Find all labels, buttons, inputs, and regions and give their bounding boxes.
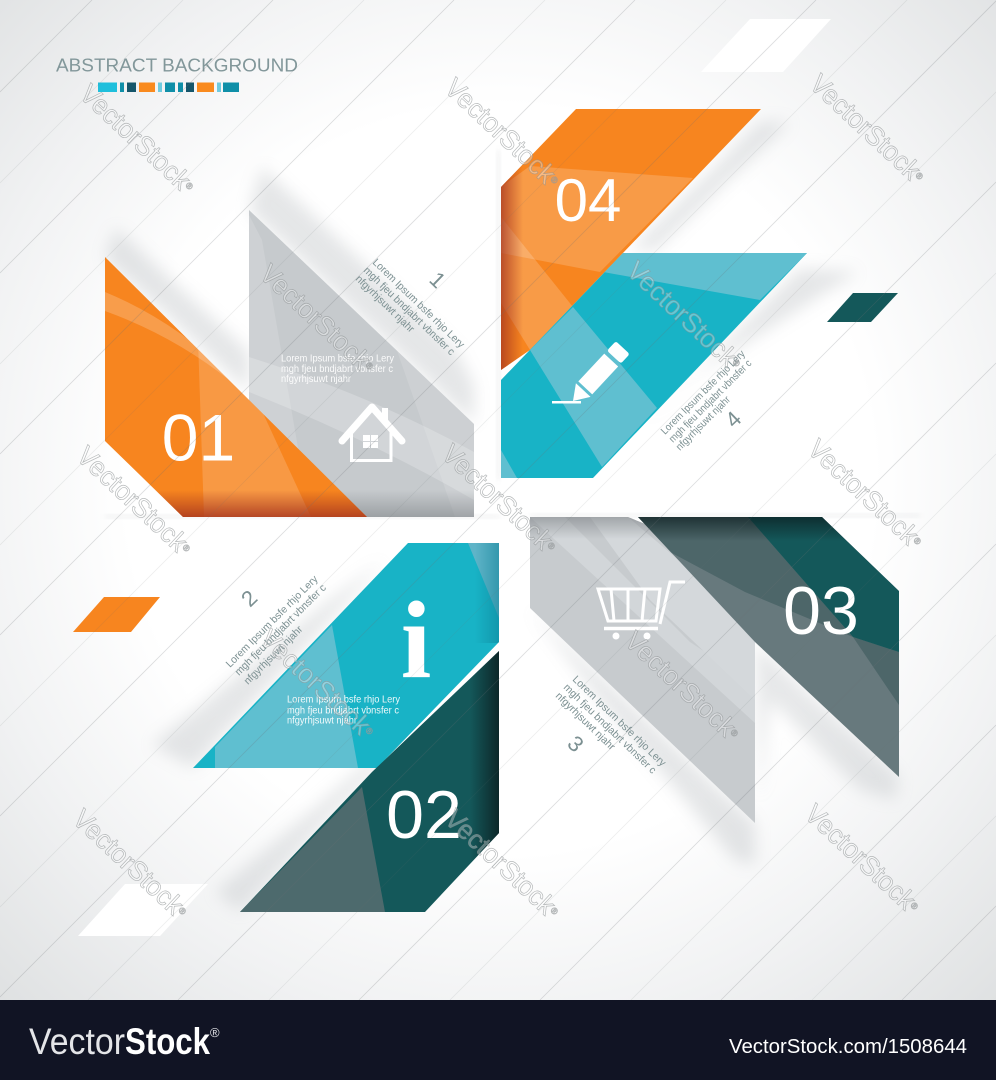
- panel: orange blade 01: [105, 257, 367, 518]
- panel: dark teal blade 02: [240, 651, 500, 913]
- watermarks: [67, 68, 931, 925]
- text block 2 rotated: Lorem Ipsum bsfe rhjo Lery: [224, 573, 321, 670]
- watermarks: ®: [363, 360, 375, 372]
- footer logo: Stock: [125, 1021, 210, 1062]
- number label 3: 3: [563, 731, 589, 757]
- text block 3 rotated: nfgyrhjsuwt njahr: [553, 690, 618, 753]
- number label 2: 2: [236, 585, 262, 612]
- number 03: 03: [783, 573, 859, 649]
- text block 1 rotated: Lorem Ipsum bsfe rhjo Lery: [370, 257, 467, 351]
- watermarks: VectorStock: [67, 803, 193, 924]
- watermarks: ®: [545, 540, 557, 552]
- panel: grey blade 3 with cart icon: [530, 517, 756, 823]
- icon: house: [342, 407, 402, 460]
- icon: pencil: [552, 341, 630, 408]
- text block: blue blade: Lorem Ipsum bsfe rhjo Lery: [287, 694, 400, 706]
- watermarks: ®: [913, 170, 925, 182]
- text block: grey blade: [281, 354, 394, 385]
- watermarks: VectorStock: [74, 78, 200, 199]
- decorative parallelogram: bottom left white: [78, 884, 208, 936]
- number label 1: 1: [425, 267, 451, 293]
- text block: blue blade: nfgyrhjsuwt njahr: [287, 716, 358, 726]
- panel: orange blade 04: [501, 109, 761, 371]
- footer image id: VectorStock.com/1508644: [729, 1036, 967, 1058]
- watermarks: VectorStock: [439, 72, 565, 193]
- number label 4: 4: [720, 406, 746, 433]
- panel: grey blade 1 with house icon: [249, 210, 475, 518]
- number 04: 04: [555, 167, 621, 234]
- text block: grey blade: nfgyrhjsuwt njahr: [281, 374, 352, 385]
- text block: blue blade: mgh fjeu bndjabrt vbnsfer c: [287, 706, 399, 716]
- text block 1 rotated: mgh fjeu bndjabrt vbnsfer c: [361, 265, 457, 358]
- watermarks: ®: [183, 180, 195, 192]
- number 01: 01: [162, 400, 235, 474]
- text block: grey blade: mgh fjeu bndjabrt vbnsfer c: [281, 364, 393, 375]
- watermarks: ®: [180, 542, 192, 554]
- soft drop shadows behind the shapes: [105, 122, 920, 912]
- icon: info: i: [401, 579, 431, 701]
- watermarks: VectorStock: [621, 255, 747, 376]
- watermarks: VectorStock: [804, 68, 930, 189]
- text block 2 rotated: nfgyrhjsuwt njahr: [242, 623, 306, 687]
- watermarks: ®: [908, 900, 920, 912]
- text block 4 rotated: Lorem Ipsum bsfe rhjo Lery: [659, 348, 748, 437]
- icon: shopping cart: [598, 582, 685, 640]
- watermarks: ®: [730, 357, 742, 369]
- number 02: 02: [386, 777, 462, 853]
- text block 2 rotated: mgh fjeu bndjabrt vbnsfer c: [233, 582, 329, 678]
- watermarks: VectorStock: [439, 803, 565, 924]
- decorative parallelogram: top right white: [701, 19, 831, 72]
- footer logo: ®: [210, 1025, 220, 1040]
- footer logo: [29, 1021, 220, 1062]
- watermarks: VectorStock: [254, 623, 380, 744]
- watermarks: ®: [548, 174, 560, 186]
- watermarks: VectorStock: [71, 440, 197, 561]
- watermarks: VectorStock: [254, 258, 380, 379]
- panel: dark teal blade 03: [638, 517, 900, 778]
- panel: blue blade top right with pencil icon: [501, 253, 807, 479]
- watermarks: VectorStock: [619, 625, 745, 746]
- decorative parallelogram: dark teal: [827, 293, 898, 322]
- watermarks: ®: [363, 725, 375, 737]
- decorative parallelogram: orange: [73, 597, 160, 632]
- title colour bar: [98, 82, 239, 92]
- text block 4 rotated: nfgyrhjsuwt njahr: [674, 393, 733, 453]
- watermarks: ®: [728, 727, 740, 739]
- watermarks: ®: [911, 535, 923, 547]
- panel: blue blade bottom left with info icon: [193, 543, 500, 769]
- footer logo: Vector: [29, 1021, 125, 1062]
- text block 4 rotated: mgh fjeu bndjabrt vbnsfer c: [667, 357, 754, 445]
- watermarks: ®: [176, 905, 188, 917]
- text block: blue blade: [287, 694, 400, 726]
- text block 3 rotated: mgh fjeu bndjabrt vbnsfer c: [561, 682, 658, 776]
- watermarks: ®: [548, 905, 560, 917]
- title: ABSTRACT BACKGROUND: [56, 54, 298, 76]
- watermarks: VectorStock: [799, 798, 925, 919]
- watermarks: VectorStock: [436, 438, 562, 559]
- text block 1 rotated: nfgyrhjsuwt njahr: [353, 273, 417, 335]
- text block 3 rotated: Lorem Ipsum bsfe rhjo Lery: [570, 674, 669, 769]
- footer bar: [0, 1000, 996, 1080]
- text block: grey blade: Lorem Ipsum bsfe rhjo Lery: [281, 354, 394, 364]
- watermarks: VectorStock: [802, 433, 928, 554]
